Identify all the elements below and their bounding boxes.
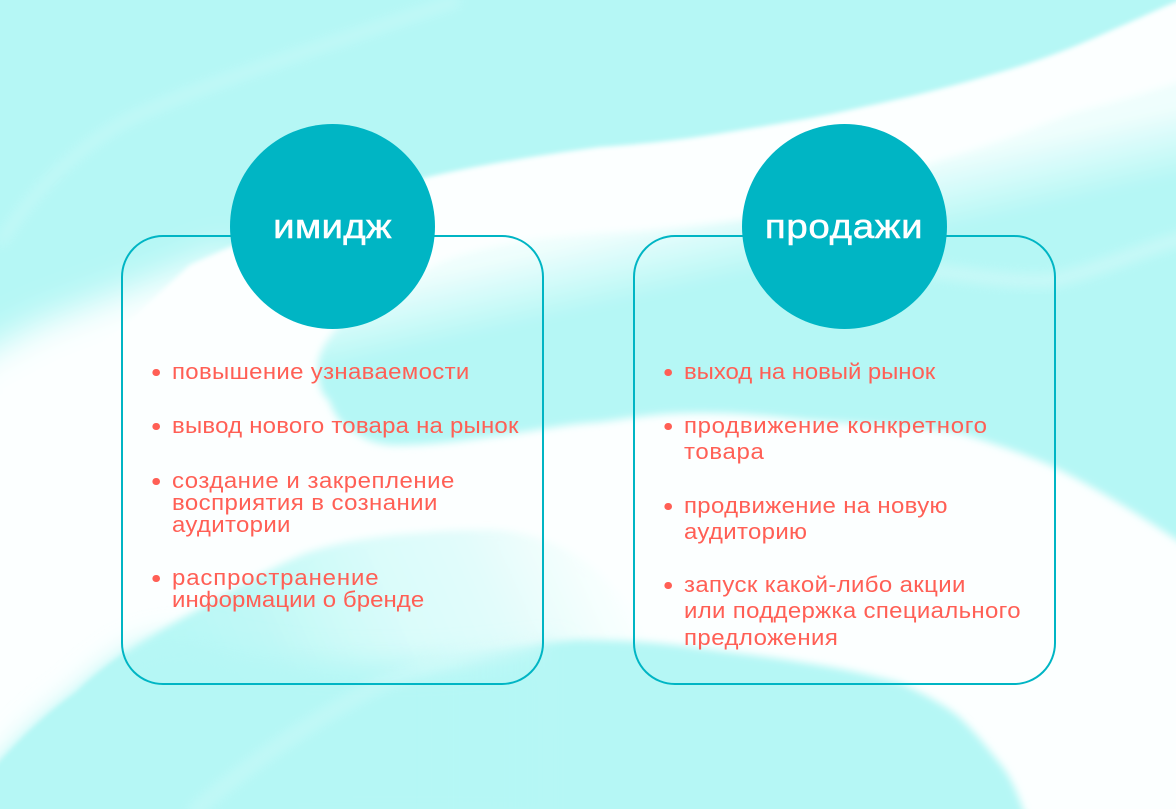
heading circle: имидж — [230, 124, 435, 329]
bullet: распространение информации о бренде: распространение — [172, 565, 379, 590]
bullet: запуск какой-либо акции: запуск какой-либо акции — [684, 572, 966, 597]
bullet: повышение узнаваемости: повышение узнаваемости — [172, 359, 470, 384]
bullet: продвижение конкретного товара — [684, 413, 988, 466]
bullet: создание и закрепление восприятия: создание и закрепление — [172, 468, 455, 493]
bullet: вывод нового товара на рынок: вывод нового товара на рынок — [172, 413, 519, 438]
bullet: продвижение конкретного товара: товара — [684, 439, 764, 464]
heading circle: имидж: имидж — [273, 208, 392, 246]
bullet: продвижение конкретного товара: продвижение конкретного — [684, 413, 988, 438]
bullet: продвижение на новую аудиторию: аудиторию — [684, 519, 807, 544]
bullet: выход на новый рынок: выход на новый рынок — [684, 359, 935, 384]
bullet: создание и закрепление восприятия — [172, 470, 455, 536]
bullet: продвижение на новую аудиторию: продвижение на новую — [684, 493, 948, 518]
bullet: распространение информации о бренде: информации о бренде — [172, 587, 424, 612]
panel: имидж — [121, 235, 544, 685]
bullet: запуск какой-либо акции — [684, 572, 1021, 651]
heading circle: продажи — [742, 124, 947, 329]
bullet: продвижение на новую аудиторию — [684, 493, 948, 546]
bullet: создание и закрепление восприятия: восприятия в сознании — [172, 490, 438, 515]
panel: продажи — [633, 235, 1056, 685]
heading circle: продажи: продажи — [765, 208, 924, 246]
bullet: запуск какой-либо акции: или поддержка специального — [684, 598, 1021, 623]
bullet: распространение информации о бренде — [172, 567, 424, 611]
bullet: запуск какой-либо акции: предложения — [684, 625, 838, 650]
bullet: создание и закрепление восприятия: аудитории — [172, 512, 291, 537]
